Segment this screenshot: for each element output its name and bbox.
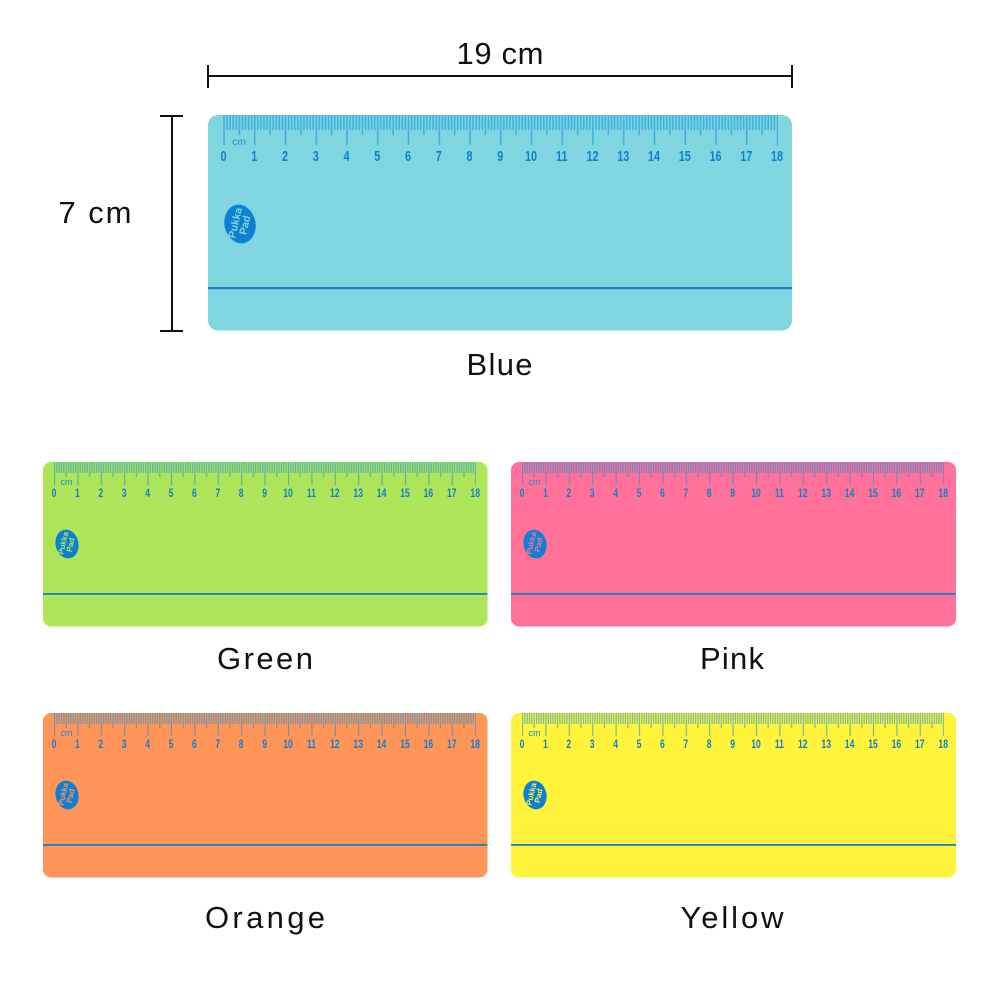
ruler numbers: 2 [282, 147, 288, 164]
ruler numbers: 7 [436, 147, 442, 164]
ruler numbers: 7 [215, 488, 220, 500]
ruler numbers: 16 [892, 488, 901, 500]
ruler ticks [522, 462, 944, 485]
ruler numbers: 16 [892, 739, 901, 751]
ruler numbers: 10 [751, 488, 761, 500]
ruler numbers: 16 [424, 488, 433, 500]
unit label: cm [528, 728, 540, 738]
ruler numbers: 12 [586, 147, 599, 164]
ruler numbers [52, 488, 480, 500]
ruler numbers: 5 [637, 488, 642, 500]
ruler numbers: 15 [868, 739, 878, 751]
ruler numbers: 4 [343, 147, 350, 164]
icon: Pukka Pad logo [520, 527, 550, 561]
icon: Pukka Pad logo [52, 527, 82, 561]
ruler numbers: 12 [330, 739, 340, 751]
ruler numbers: 17 [447, 739, 457, 751]
ruler ticks [522, 713, 944, 736]
ruler ticks [54, 713, 476, 736]
ruler numbers: 0 [220, 147, 227, 164]
ruler numbers: 8 [707, 739, 712, 751]
ruler numbers: 4 [613, 739, 618, 751]
ruler numbers: 10 [283, 739, 293, 751]
ruler numbers: 13 [353, 739, 363, 751]
ruler numbers: 18 [470, 739, 480, 751]
ruler numbers: 18 [938, 488, 948, 500]
panel: pink ruler [511, 462, 956, 626]
ruler numbers: 6 [192, 739, 197, 751]
ruler numbers: 15 [868, 488, 878, 500]
unit label: cm [528, 477, 540, 487]
icon: Pukka Pad logo: Pukka [524, 530, 539, 555]
ruler numbers: 15 [679, 147, 691, 164]
panel: green ruler [43, 462, 488, 626]
ruler edge line [511, 844, 956, 846]
ruler numbers [520, 739, 948, 751]
ruler numbers: 0 [52, 488, 57, 500]
ruler numbers: 10 [525, 147, 537, 164]
panel: blue ruler [208, 115, 792, 330]
icon: Pukka Pad logo: Pukka [226, 206, 245, 239]
ruler numbers: 1 [543, 739, 548, 751]
ruler numbers: 13 [617, 147, 629, 164]
panel: yellow ruler [511, 713, 956, 878]
ruler numbers: 7 [683, 739, 688, 751]
ruler numbers: 1 [75, 488, 80, 500]
icon: Pukka Pad logo: Pukka [524, 781, 539, 806]
ruler numbers: 5 [374, 147, 380, 164]
ruler numbers: 11 [307, 488, 316, 500]
ruler numbers: 1 [251, 147, 257, 164]
ruler numbers: 0 [52, 739, 57, 751]
ruler numbers: 12 [798, 739, 808, 751]
ruler numbers: 6 [405, 147, 411, 164]
height label: 7 cm [58, 195, 132, 230]
ruler numbers: 14 [845, 488, 855, 500]
icon: Pukka Pad logo: Pad [237, 215, 253, 236]
ruler numbers: 4 [613, 488, 618, 500]
ruler numbers: 3 [590, 739, 595, 751]
ruler numbers: 10 [751, 739, 761, 751]
ruler numbers: 6 [660, 488, 665, 500]
unit label: cm [232, 136, 246, 148]
ruler numbers: 8 [239, 488, 244, 500]
ruler numbers: 11 [775, 488, 784, 500]
ruler numbers [220, 147, 783, 164]
icon: Pukka Pad logo [220, 201, 261, 246]
ruler numbers: 0 [520, 488, 525, 500]
ruler numbers: 17 [447, 488, 457, 500]
ruler numbers: 18 [470, 488, 480, 500]
ruler numbers: 16 [709, 147, 722, 164]
ruler numbers: 1 [543, 488, 548, 500]
ruler numbers: 14 [377, 488, 387, 500]
ruler numbers: 17 [740, 147, 752, 164]
ruler numbers: 18 [771, 147, 783, 164]
ruler numbers: 13 [353, 488, 363, 500]
icon: Pukka Pad logo: Pad [533, 788, 545, 804]
ruler numbers: 1 [75, 739, 80, 751]
ruler numbers: 15 [400, 739, 410, 751]
ruler numbers: 8 [466, 147, 473, 164]
ruler numbers: 2 [98, 488, 103, 500]
ruler numbers: 17 [915, 488, 925, 500]
ruler numbers: 2 [98, 739, 103, 751]
ruler numbers: 17 [915, 739, 925, 751]
icon: Pukka Pad logo: Pad [533, 537, 545, 553]
width label: 19 cm [456, 36, 544, 71]
ruler numbers: 11 [556, 147, 567, 164]
ruler numbers: 5 [169, 488, 174, 500]
ruler numbers: 7 [683, 488, 688, 500]
ruler numbers: 4 [145, 488, 150, 500]
icon: Pukka Pad logo [520, 778, 550, 812]
panel: orange ruler [43, 713, 488, 878]
ruler numbers: 2 [566, 739, 571, 751]
ruler numbers: 3 [122, 488, 127, 500]
ruler numbers: 5 [169, 739, 174, 751]
label: Blue: Blue [466, 347, 532, 382]
ruler numbers: 3 [313, 147, 319, 164]
ruler edge line [43, 593, 488, 595]
ruler numbers: 4 [145, 739, 150, 751]
ruler numbers: 11 [775, 739, 784, 751]
icon: Pukka Pad logo [52, 778, 82, 812]
ruler numbers [520, 488, 948, 500]
ruler ticks [54, 462, 476, 485]
ruler numbers: 14 [845, 739, 855, 751]
icon: Pukka Pad logo: Pad [65, 537, 77, 553]
icon: Pukka Pad logo: Pukka [56, 781, 71, 806]
ruler numbers: 3 [590, 488, 595, 500]
ruler ticks [223, 115, 778, 145]
ruler numbers: 8 [239, 739, 244, 751]
ruler numbers: 8 [707, 488, 712, 500]
label: Orange: Orange [205, 900, 325, 935]
ruler numbers: 6 [660, 739, 665, 751]
icon: Pukka Pad logo: Pukka [56, 530, 71, 555]
ruler numbers: 15 [400, 488, 410, 500]
unit label: cm [60, 477, 72, 487]
ruler numbers: 9 [497, 147, 503, 164]
ruler numbers: 16 [424, 739, 433, 751]
ruler numbers: 2 [566, 488, 571, 500]
ruler numbers: 5 [637, 739, 642, 751]
ruler edge line [208, 287, 792, 289]
ruler numbers: 9 [262, 488, 267, 500]
ruler numbers: 3 [122, 739, 127, 751]
label: Pink: Pink [700, 641, 764, 676]
ruler numbers: 12 [330, 488, 340, 500]
ruler numbers: 14 [648, 147, 661, 164]
ruler numbers: 10 [283, 488, 293, 500]
height dimension arrow [58, 116, 183, 331]
width dimension arrow [208, 36, 792, 88]
ruler numbers: 13 [821, 488, 831, 500]
ruler numbers: 6 [192, 488, 197, 500]
unit label: cm [60, 728, 72, 738]
ruler numbers: 18 [938, 739, 948, 751]
icon: Pukka Pad logo: Pad [65, 788, 77, 804]
label: Yellow: Yellow [680, 900, 784, 935]
ruler numbers: 9 [730, 739, 735, 751]
ruler numbers: 9 [730, 488, 735, 500]
ruler numbers: 11 [307, 739, 316, 751]
ruler numbers [52, 739, 480, 751]
ruler numbers: 13 [821, 739, 831, 751]
ruler edge line [43, 844, 488, 846]
ruler edge line [511, 593, 956, 595]
ruler numbers: 7 [215, 739, 220, 751]
ruler numbers: 12 [798, 488, 808, 500]
label: Green: Green [217, 641, 313, 676]
ruler numbers: 0 [520, 739, 525, 751]
ruler numbers: 14 [377, 739, 387, 751]
ruler numbers: 9 [262, 739, 267, 751]
